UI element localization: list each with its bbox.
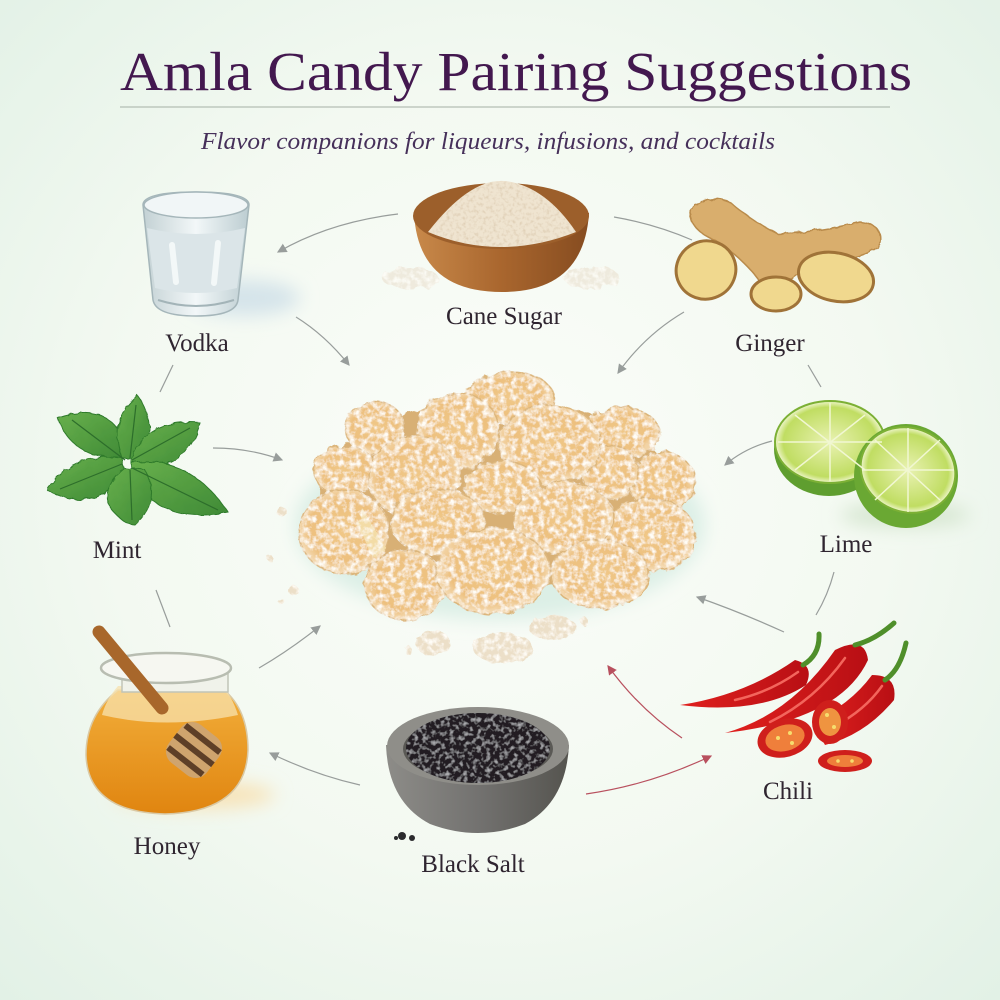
icon: stone bowl of black salt <box>386 707 569 841</box>
flow arrows <box>156 214 834 785</box>
icon: chili peppers <box>680 623 906 772</box>
icon: lime <box>774 401 970 528</box>
subtitle: Flavor companions for liqueurs, infusions, and cocktails <box>200 129 775 155</box>
label: Ginger: Ginger <box>735 330 805 357</box>
label: Mint: Mint <box>93 537 141 564</box>
label: Vodka: Vodka <box>165 330 229 357</box>
label: Cane Sugar: Cane Sugar <box>446 303 563 330</box>
icon: vodka glass <box>143 192 300 316</box>
label: Black Salt: Black Salt <box>421 851 525 878</box>
label: Honey: Honey <box>134 833 201 860</box>
icon: ginger <box>667 199 881 311</box>
icon: amla candy pile <box>267 372 705 663</box>
icon: honey jar with dipper <box>86 632 275 814</box>
label: Chili: Chili <box>763 778 813 805</box>
title: Amla Candy Pairing Suggestions <box>120 41 912 102</box>
icon: mint <box>47 396 228 525</box>
label: Lime: Lime <box>820 531 872 558</box>
icon: bowl of cane sugar <box>382 181 620 292</box>
